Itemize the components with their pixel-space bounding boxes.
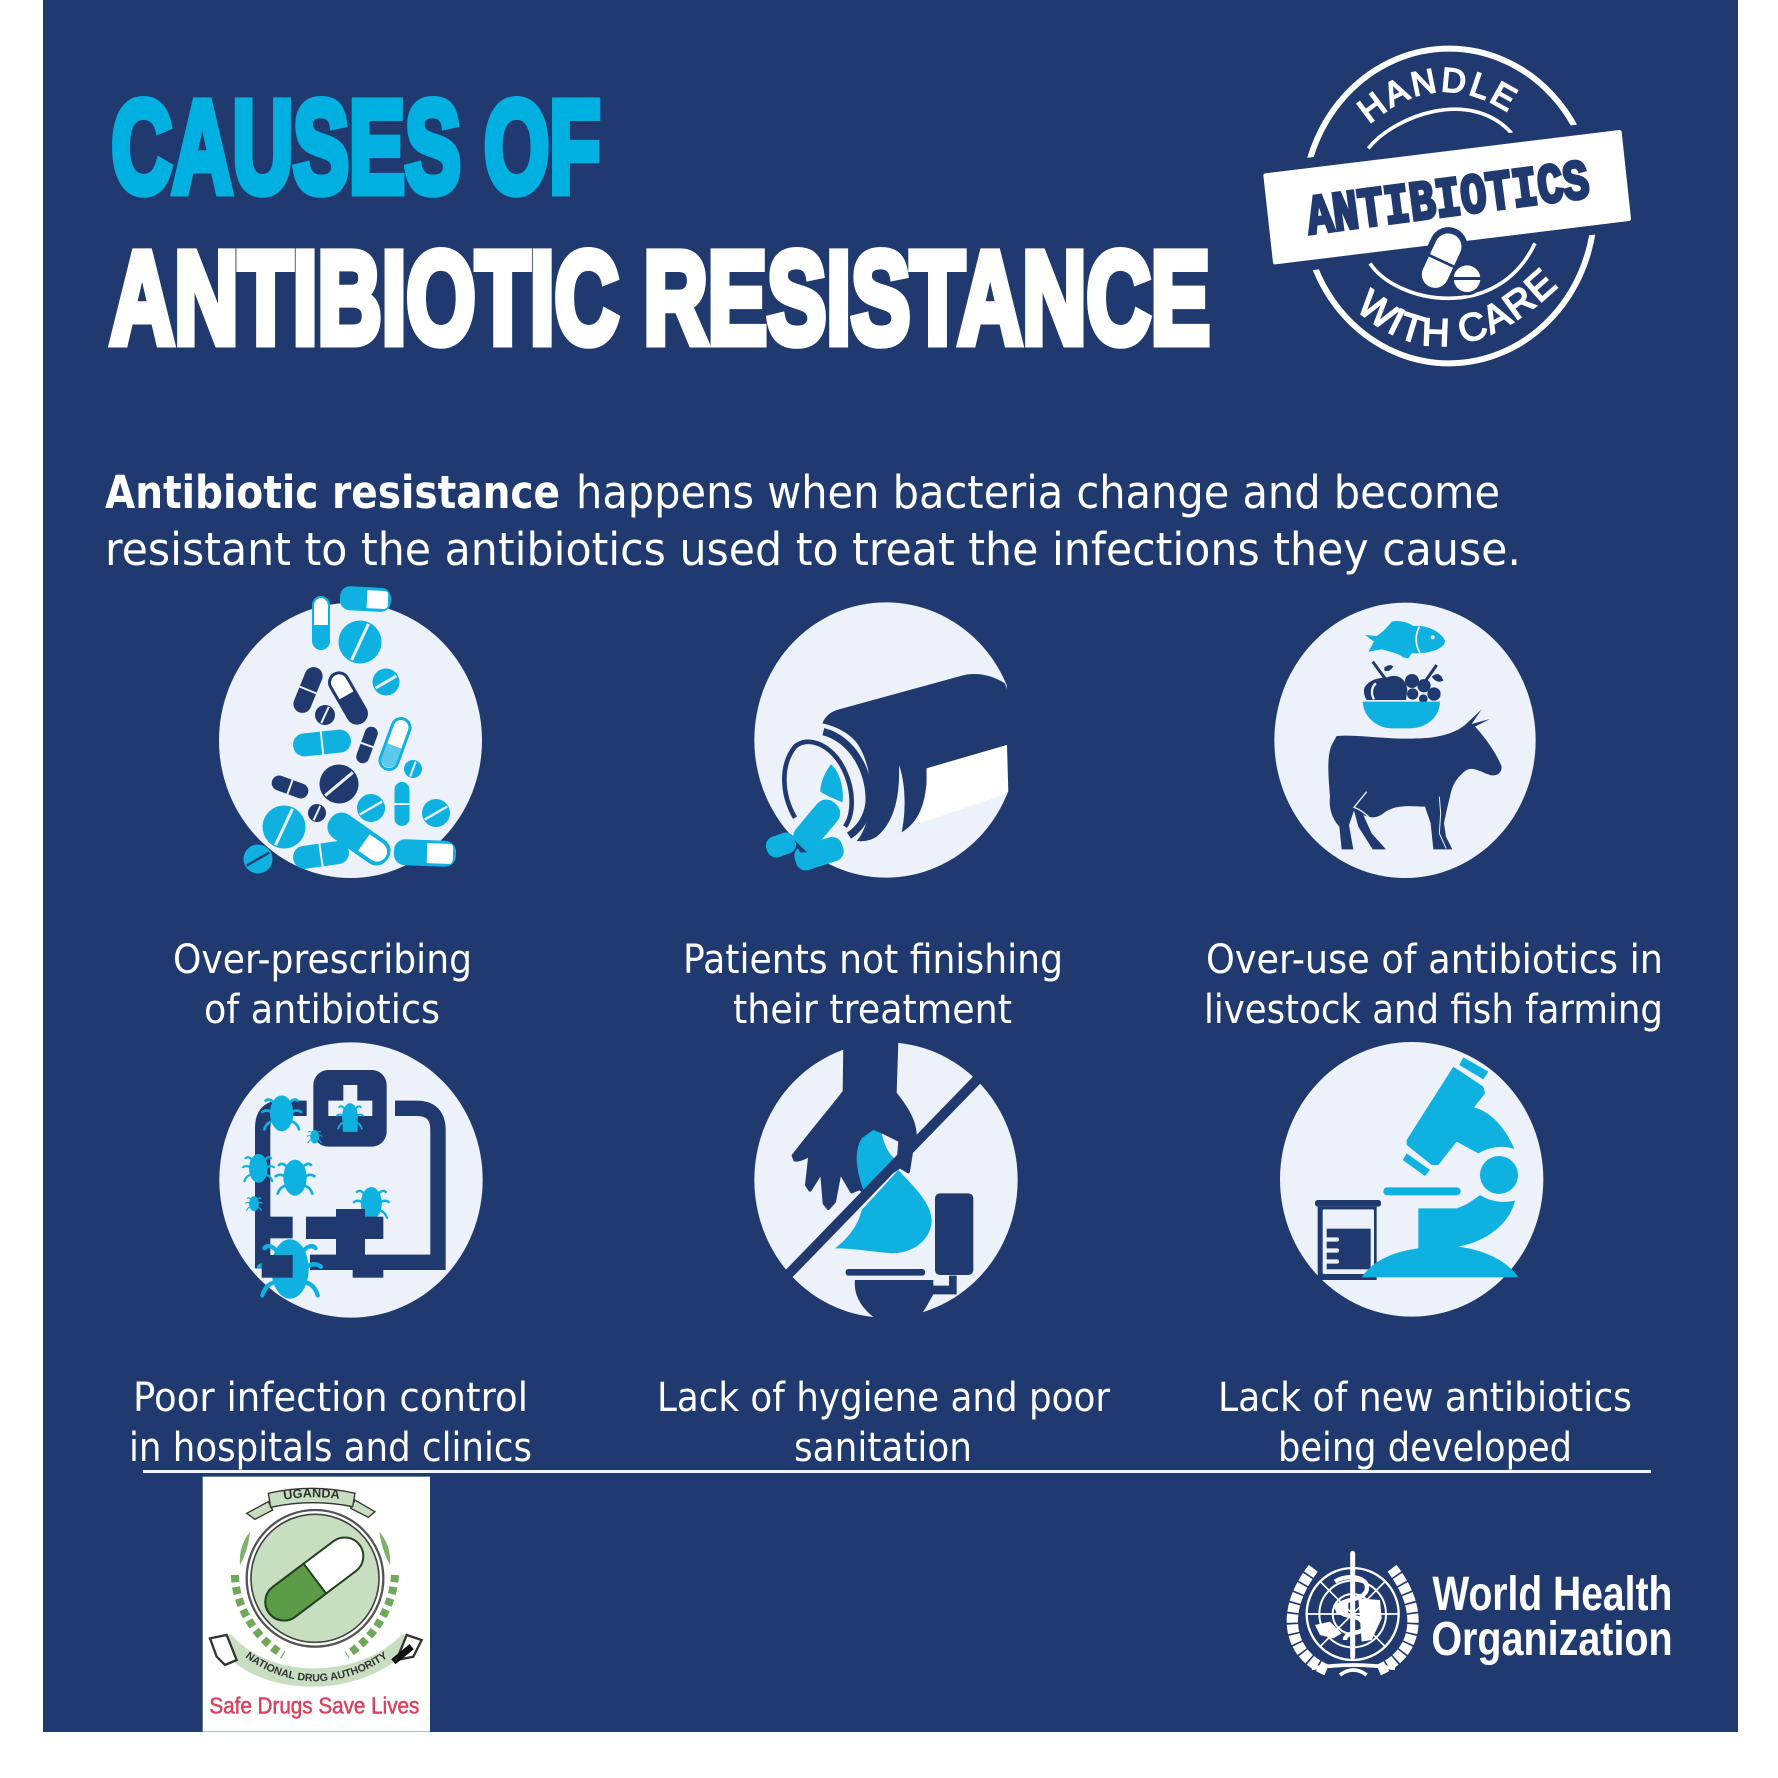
- caption: new antibiotics: [1218, 1375, 1632, 1471]
- caption: patients not finishing: their treatment: [733, 987, 1012, 1033]
- caption: hygiene and sanitation: Lack of hygiene and poor: [657, 1375, 1110, 1421]
- caption: poor infection control: in hospitals and clinics: [129, 1425, 532, 1471]
- caption: poor infection control: [129, 1375, 532, 1471]
- caption: new antibiotics: being developed: [1278, 1425, 1572, 1471]
- icon: bottle with spilling pills: [754, 602, 1022, 878]
- icon: hygiene and sanitation: [754, 1041, 1018, 1322]
- caption: patients not finishing: [683, 937, 1063, 1033]
- caption: livestock and fish farming: [1204, 937, 1663, 1033]
- logo: national drug authority: NATIONAL DRUG AUTHORITY: [246, 1651, 386, 1682]
- stamp: handle antibiotics with care: ANTIBIOTICS: [1303, 150, 1593, 251]
- caption: over-prescribing: of antibiotics: [204, 987, 440, 1033]
- stamp: handle antibiotics with care: [1263, 46, 1631, 366]
- logo: national drug authority: Safe Drugs Save Lives: [209, 1692, 419, 1718]
- intro text: resistant to the antibiotics used to treat the infections they cause.: [105, 523, 1521, 576]
- footer divider line: [143, 1470, 1651, 1473]
- logo: world health organization: World Health: [1432, 1567, 1672, 1621]
- caption: hygiene and sanitation: sanitation: [794, 1425, 972, 1471]
- stamp: handle antibiotics with care: HANDLE: [1356, 67, 1518, 124]
- intro text: happens when bacteria change and become: [576, 466, 1500, 519]
- stamp: handle antibiotics with care: WITH CARE: [1360, 267, 1558, 347]
- logo: world health organization: [1292, 1553, 1673, 1675]
- icon: over-prescribing pills: [219, 586, 482, 879]
- logo: national drug authority: [202, 1476, 430, 1732]
- caption: hygiene and sanitation: [657, 1375, 1110, 1471]
- logo: world health organization: Organization: [1431, 1612, 1673, 1666]
- caption: poor infection control: Poor infection control: [133, 1375, 528, 1421]
- intro text: Antibiotic resistance: [105, 466, 560, 519]
- caption: patients not finishing: Patients not finishing: [683, 937, 1063, 983]
- caption: livestock and fish farming: livestock and fish farming: [1204, 987, 1663, 1033]
- caption: new antibiotics: Lack of new antibiotics: [1218, 1375, 1632, 1421]
- icon: poor infection control: [219, 1042, 483, 1318]
- icon: microscope and beaker: [1280, 1042, 1543, 1317]
- caption: livestock and fish farming: Over-use of antibiotics in: [1206, 937, 1663, 983]
- caption: over-prescribing: Over-prescribing: [173, 937, 472, 983]
- logo: national drug authority: UGANDA: [284, 1489, 339, 1500]
- caption: over-prescribing: [173, 937, 472, 1033]
- title: causes of: CAUSES OF: [112, 73, 600, 220]
- intro text: [105, 466, 1521, 576]
- icon: livestock and fish: [1274, 603, 1536, 878]
- title: antibiotic resistance: ANTIBIOTIC RESISTANCE: [110, 224, 1210, 371]
